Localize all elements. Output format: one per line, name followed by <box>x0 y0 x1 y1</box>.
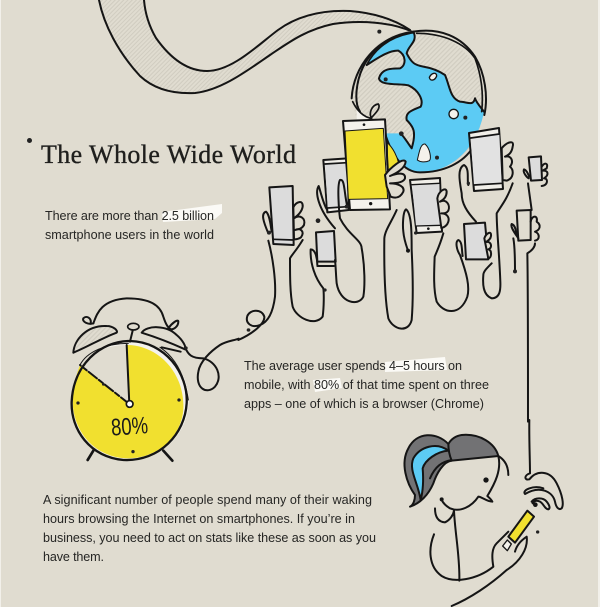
text block: mobile time: mobile, with 80% of that time spent on three <box>244 378 489 392</box>
lower-left phone <box>316 231 336 262</box>
text block: mobile time: The average user spends 4–5 hours on <box>244 359 462 373</box>
text block: act on stats: hours browsing the Internet on smartphones. If you’re in <box>43 512 355 526</box>
text block: act on stats: A significant number of people spend many of their waking <box>43 493 372 507</box>
face <box>442 456 499 510</box>
globe oceans <box>367 32 484 172</box>
left phone <box>269 186 294 245</box>
alarm clock <box>71 298 250 461</box>
globe <box>352 30 486 172</box>
arm and body <box>430 532 508 580</box>
text block: smartphone users: There are more than 2.5 billion <box>45 209 214 223</box>
upper right tall phone <box>469 128 503 191</box>
title: The Whole Wide World <box>41 140 296 169</box>
far right small phone <box>529 156 542 181</box>
person with phone <box>405 420 563 606</box>
yellow phone <box>343 119 390 210</box>
lower-right phone <box>464 223 488 259</box>
held phone <box>508 511 534 543</box>
clock label: 80% <box>110 412 149 441</box>
centre phone <box>410 178 442 233</box>
decorative dot near title <box>27 138 32 143</box>
text block: mobile time: apps – one of which is a browser (Chrome) <box>244 397 484 411</box>
text block: smartphone users: smartphone users in the world <box>45 228 214 242</box>
text block: mobile time <box>244 357 489 411</box>
right phone with long cord <box>517 210 531 241</box>
yellow sliver beside phone <box>387 143 399 171</box>
clock cord <box>185 339 239 390</box>
text block: smartphone users <box>45 204 222 242</box>
yellow phone hand <box>385 160 406 198</box>
phone behind yellow phone <box>323 158 349 212</box>
globe islands <box>429 73 437 80</box>
ribbon swoosh <box>99 0 413 93</box>
clock feet <box>88 451 172 461</box>
clock face <box>71 342 189 459</box>
clock bells <box>73 326 117 353</box>
wifi signal <box>524 420 563 509</box>
hair <box>405 435 498 507</box>
text block: act on stats: business, you need to act on stats like these as soon as you <box>43 531 376 545</box>
text block: act on stats: have them. <box>43 550 104 564</box>
raised hands with phones <box>238 119 548 422</box>
text block: act on stats <box>43 493 376 564</box>
